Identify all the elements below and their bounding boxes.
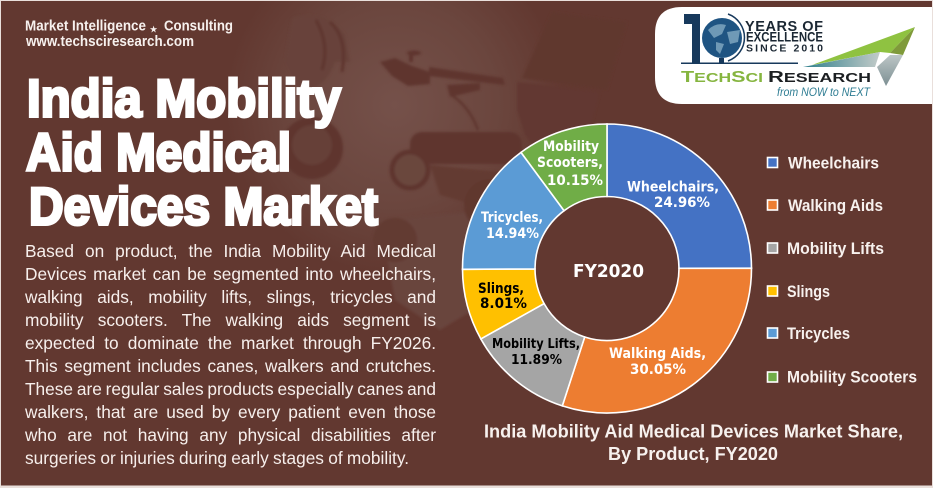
chart caption: India Mobility Aid Medical Devices Market Share, bbox=[484, 422, 903, 442]
donut labels: 30.05% bbox=[630, 362, 686, 378]
segment: tricycles bbox=[462, 152, 564, 269]
logo panel bbox=[655, 7, 932, 104]
legend item: mobility scooters: Mobility Scooters bbox=[787, 368, 917, 386]
donut chart bbox=[462, 124, 752, 413]
legend item: slings: Slings bbox=[787, 282, 830, 301]
body paragraph: These are regular sales products especially canes and bbox=[25, 379, 436, 399]
chart caption: By Product, FY2020 bbox=[608, 444, 778, 464]
title: Devices Market bbox=[29, 178, 378, 236]
segment: wheelchairs bbox=[607, 124, 752, 268]
segment: walking aids bbox=[562, 268, 752, 413]
segment: mobility lifts bbox=[481, 304, 585, 406]
header: company tagline: Consulting bbox=[164, 18, 233, 34]
donut labels: 8.01% bbox=[480, 296, 527, 312]
body paragraph: expected to dominate the market through FY2026. bbox=[25, 333, 436, 353]
body paragraph: mobility scooters. The walking aids segment is bbox=[25, 310, 436, 330]
logo: years of excellence text: EXCELLENCE bbox=[746, 30, 823, 44]
segment: slings bbox=[462, 269, 544, 339]
logo: years of excellence text bbox=[745, 19, 823, 54]
logo: slogan: from NOW to NEXT bbox=[777, 85, 871, 99]
header: company tagline: www.techsciresearch.com bbox=[25, 34, 194, 50]
donut labels: 24.96% bbox=[654, 195, 710, 211]
body paragraph: surgeries or injuries during early stages of mobility. bbox=[25, 448, 409, 468]
donut centre label: FY2020 bbox=[573, 262, 644, 282]
background wheelchair photo bbox=[281, 12, 627, 330]
legend bbox=[768, 154, 917, 386]
logo: globe bbox=[702, 14, 744, 63]
donut labels: Scooters, bbox=[537, 155, 603, 171]
legend item: wheelchairs: Wheelchairs bbox=[788, 154, 879, 172]
legend item: tricycles: Tricycles bbox=[787, 324, 850, 343]
donut labels: Slings, bbox=[478, 281, 524, 297]
body paragraph: walking aids, mobility lifts, slings, tricycles and bbox=[25, 287, 436, 307]
body paragraph: Devices market can be segmented into wheelchairs, bbox=[25, 264, 436, 284]
title bbox=[26, 70, 378, 236]
donut labels: Walking Aids, bbox=[609, 346, 706, 362]
title: Aid Medical bbox=[26, 124, 291, 182]
logo: years of excellence text: YEARS OF bbox=[745, 19, 823, 35]
donut labels: Tricycles, bbox=[481, 210, 543, 226]
header: company tagline bbox=[25, 18, 233, 50]
chart caption bbox=[484, 422, 903, 464]
logo: techsci research wordmark: R ESEARCH bbox=[768, 69, 871, 86]
donut labels: Mobility Lifts, bbox=[492, 337, 580, 352]
logo: paper plane bbox=[803, 27, 915, 86]
logo: techsci research wordmark bbox=[681, 69, 871, 86]
legend item: slings bbox=[768, 282, 830, 301]
body paragraph bbox=[25, 241, 436, 468]
donut labels: Mobility bbox=[543, 139, 599, 155]
legend item: mobility lifts: Mobility Lifts bbox=[787, 239, 884, 258]
donut labels: 11.89% bbox=[511, 353, 562, 368]
donut labels: 14.94% bbox=[486, 226, 539, 242]
body paragraph: This segment includes canes, walkers and crutches. bbox=[25, 356, 436, 376]
legend item: tricycles bbox=[768, 324, 850, 343]
logo: techsci research wordmark: T ECH S CI bbox=[681, 69, 763, 86]
segment: mobility scooters bbox=[521, 124, 607, 211]
body paragraph: walkers, that are used by every patient even those bbox=[25, 402, 436, 422]
logo: years of excellence text: SINCE 2010 bbox=[746, 42, 823, 54]
title: India Mobility bbox=[27, 70, 341, 128]
donut labels: Wheelchairs, bbox=[627, 180, 719, 196]
donut labels: 10.15% bbox=[547, 173, 603, 189]
legend item: walking aids: Walking Aids bbox=[788, 196, 883, 215]
body paragraph: who are not having any physical disabilities after bbox=[25, 425, 436, 445]
logo: anniversary numeral one bbox=[684, 14, 700, 63]
body paragraph: Based on product, the India Mobility Aid Medical bbox=[25, 241, 436, 261]
header: company tagline: ★ bbox=[150, 25, 158, 34]
header: company tagline: Market Intelligence bbox=[25, 18, 146, 34]
donut labels bbox=[478, 139, 719, 378]
